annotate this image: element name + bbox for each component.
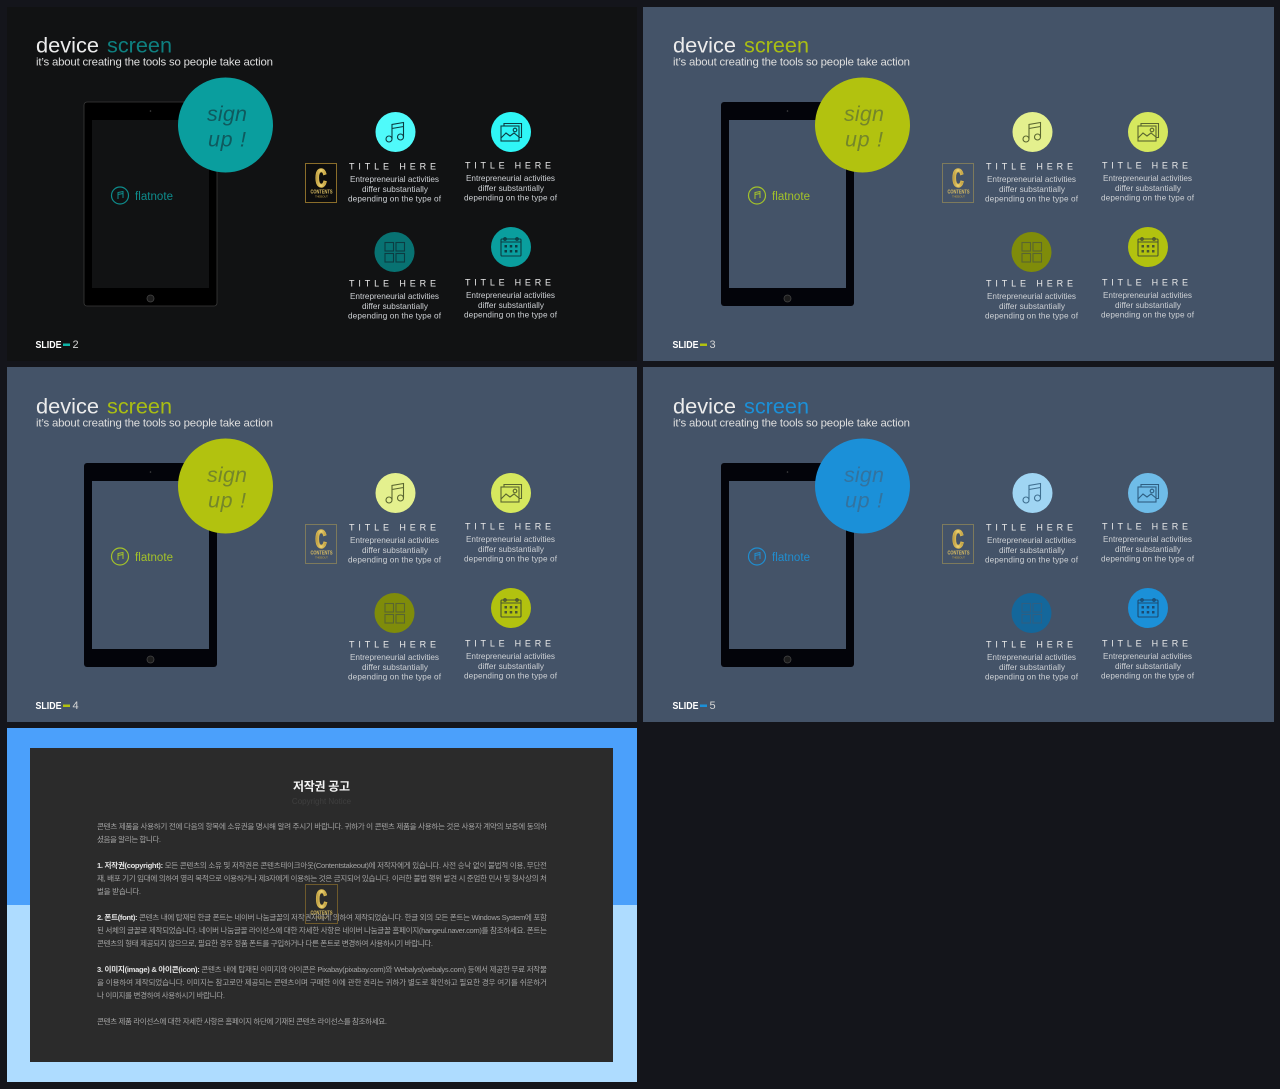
section 1: copyright: 재, 배포 기기 임대에 의하여 영리 목적으로 이용하거나 제3자에게 이용하는 것은 금지되어 있습니다. 이러한 불법 행위 발견 시 준엄한 민사 및 형사상의 처 xyxy=(97,873,547,883)
watermark logo xyxy=(942,164,974,202)
feature: photo xyxy=(464,473,558,564)
slide number: SLIDE xyxy=(36,340,62,351)
watermark logo: C xyxy=(952,166,964,196)
feature: photo: depending on the type of xyxy=(1101,554,1195,564)
sign up badge: sign xyxy=(207,102,247,126)
feature: photo: depending on the type of xyxy=(1101,194,1195,202)
feature: photo: differ substantially xyxy=(478,545,545,554)
slide number: 5 xyxy=(710,700,716,712)
watermark logo: C xyxy=(315,166,327,196)
section 2: font: 된 서체의 글꼴로 제작되었습니다. 네이버 나눔글꼴 라이선스에 대한 자세한 사항은 네이버 나눔글꼴 홈페이지(hangeul.naver.com)를 참조하세요. 폰트는 xyxy=(97,925,547,935)
tablet device xyxy=(84,463,217,667)
flatnote logo xyxy=(112,187,173,204)
section 3: image and icon: 3. 이미지(image) & 아이콘(icon): 콘텐츠 내에 탑재된 이미지와 아이콘은 Pixabay(pixabay.com)와 Webalys(webalys.com) 등에서 제공한 무료 저작물 xyxy=(97,964,547,974)
feature: grid: TITLE HERE xyxy=(349,278,436,288)
heading: device screen: device xyxy=(673,34,736,58)
feature: grid: Entrepreneurial activities xyxy=(987,653,1076,662)
watermark logo: THEBOUT xyxy=(315,916,328,920)
feature: grid: Entrepreneurial activities xyxy=(987,292,1076,301)
feature: photo: differ substantially xyxy=(478,184,545,193)
heading: device screen: device xyxy=(36,34,99,58)
feature: photo xyxy=(1101,473,1195,564)
tablet device xyxy=(84,102,217,306)
feature: calendar: Entrepreneurial activities xyxy=(1103,652,1192,661)
feature: grid: depending on the type of xyxy=(985,312,1079,320)
flatnote logo xyxy=(112,548,173,565)
feature: music: differ substantially xyxy=(999,546,1066,555)
watermark logo: CONTENTS xyxy=(310,190,333,196)
feature: calendar: differ substantially xyxy=(478,301,545,310)
flatnote logo: flatnote xyxy=(135,552,173,564)
feature: calendar: TITLE HERE xyxy=(1102,278,1188,288)
section 2: font: 2. 폰트(font): 콘텐츠 내에 탑재된 한글 폰트는 네이버 나눔글꼴의 저작권자에게 의하여 제작되었습니다. 한글 외의 모든 폰트는 Windows System에 포함 xyxy=(97,912,547,922)
sign up badge: sign xyxy=(844,463,884,487)
feature: calendar: Entrepreneurial activities xyxy=(466,291,555,300)
notice title: 저작권 공고 xyxy=(293,778,350,794)
heading: device screen: device xyxy=(36,396,99,418)
heading: device screen: screen xyxy=(107,34,172,58)
closing line: 콘텐츠 제품 라이선스에 대한 자세한 사항은 홈페이지 하단에 기재된 콘텐츠 라이선스를 참조하세요. xyxy=(97,1016,387,1026)
panel: slide 5 xyxy=(643,367,1274,722)
feature: grid: Entrepreneurial activities xyxy=(350,653,439,662)
feature: calendar: differ substantially xyxy=(478,662,545,671)
feature: music: Entrepreneurial activities xyxy=(987,175,1076,184)
feature: music: differ substantially xyxy=(999,185,1066,194)
sign up badge: sign xyxy=(207,463,247,487)
feature: calendar xyxy=(464,588,558,680)
watermark logo: THEBOUT xyxy=(315,556,328,560)
feature: photo xyxy=(464,112,558,202)
section 1: copyright xyxy=(97,860,547,896)
watermark logo: THEBOUT xyxy=(315,194,328,198)
feature: music xyxy=(985,112,1079,204)
feature: photo: TITLE HERE xyxy=(465,160,551,170)
heading: device screen xyxy=(36,34,172,58)
feature: music: TITLE HERE xyxy=(349,522,436,532)
slide number: SLIDE xyxy=(672,340,699,351)
feature: music xyxy=(985,473,1079,564)
heading: device screen xyxy=(673,396,809,418)
section 2: font xyxy=(97,912,547,948)
heading: device screen: device xyxy=(673,396,736,418)
feature: music: TITLE HERE xyxy=(986,522,1073,532)
sign up badge: up ! xyxy=(208,128,246,152)
section 3: image and icon: 을 이용하여 제작되었습니다. 이미지는 참고로만 제공되는 콘텐츠이며 구매한 이에 관한 권리는 귀하가 별도로 확인하고 필요한 경우 여기를 쉬운하거 xyxy=(97,977,547,987)
feature: music: differ substantially xyxy=(362,546,429,555)
feature: music: Entrepreneurial activities xyxy=(350,536,439,545)
feature: photo: TITLE HERE xyxy=(465,522,551,532)
feature: grid: depending on the type of xyxy=(348,312,442,320)
feature: calendar: TITLE HERE xyxy=(465,638,551,648)
slide number xyxy=(672,700,716,712)
feature: photo: Entrepreneurial activities xyxy=(466,174,555,183)
feature: photo: Entrepreneurial activities xyxy=(1103,174,1192,183)
feature: photo: Entrepreneurial activities xyxy=(466,535,555,544)
subtitle: it’s about creating the tools so people take action xyxy=(36,56,273,68)
feature: calendar: differ substantially xyxy=(1115,301,1182,310)
watermark logo xyxy=(942,524,974,564)
feature: grid xyxy=(985,593,1079,682)
feature: music: TITLE HERE xyxy=(349,162,436,172)
slide number: SLIDE xyxy=(36,701,62,712)
heading: device screen: screen xyxy=(107,396,172,418)
watermark logo: THEBOUT xyxy=(952,556,965,560)
feature: grid: differ substantially xyxy=(362,302,429,311)
watermark logo: CONTENTS xyxy=(310,550,333,556)
feature: calendar: TITLE HERE xyxy=(1102,638,1188,648)
feature: music: depending on the type of xyxy=(985,556,1079,564)
section 3: image and icon: 나 이미지를 변경하여 사용하시기 바랍니다. xyxy=(97,990,225,1000)
section 1: copyright: 벌을 받습니다. xyxy=(97,886,141,896)
feature: music: differ substantially xyxy=(362,185,429,194)
slide number: 4 xyxy=(72,700,79,712)
sign up badge: up ! xyxy=(845,128,883,152)
watermark logo: THEBOUT xyxy=(952,194,965,198)
watermark logo: CONTENTS xyxy=(948,190,970,196)
flatnote logo: flatnote xyxy=(135,191,173,203)
feature: photo: differ substantially xyxy=(1115,184,1182,193)
feature: grid xyxy=(348,593,442,682)
feature: music: depending on the type of xyxy=(985,194,1079,204)
sign up badge: up ! xyxy=(208,488,246,512)
sign up badge xyxy=(178,78,273,172)
feature: calendar: depending on the type of xyxy=(1101,310,1195,320)
watermark logo: C xyxy=(315,527,327,557)
watermark logo xyxy=(306,164,336,202)
heading: device screen: screen xyxy=(744,34,809,58)
slide number xyxy=(36,700,79,712)
tablet device xyxy=(721,102,854,306)
feature: music: depending on the type of xyxy=(348,194,442,204)
feature: calendar: differ substantially xyxy=(1115,662,1182,671)
feature: calendar xyxy=(1101,227,1195,320)
sign up badge: sign xyxy=(844,102,884,126)
slide number: 3 xyxy=(710,339,716,351)
flatnote logo: flatnote xyxy=(772,552,810,564)
section 1: copyright: 1. 저작권(copyright): 모든 콘텐츠의 소유 및 저작권은 콘텐츠테이크아웃(Contentstakeout)에 저작자에게 있습니다. 사전 승낙 없이 불법적 이용, 무단전 xyxy=(97,860,547,870)
feature: photo: TITLE HERE xyxy=(1102,522,1188,532)
feature: grid: differ substantially xyxy=(362,663,429,672)
watermark logo: C xyxy=(316,887,328,917)
feature: calendar xyxy=(1101,588,1195,680)
section 3: image and icon xyxy=(97,964,547,1000)
feature: photo: TITLE HERE xyxy=(1102,160,1188,170)
watermark logo: CONTENTS xyxy=(310,910,333,916)
feature: calendar: Entrepreneurial activities xyxy=(1103,291,1192,300)
subtitle: it’s about creating the tools so people take action xyxy=(36,418,273,430)
heading: device screen xyxy=(36,396,172,418)
feature: music xyxy=(348,473,442,564)
subtitle: it’s about creating the tools so people take action xyxy=(673,56,910,68)
feature: grid: depending on the type of xyxy=(348,672,442,682)
feature: grid: differ substantially xyxy=(999,302,1066,311)
feature: grid: depending on the type of xyxy=(985,672,1079,682)
feature: photo: depending on the type of xyxy=(464,194,558,202)
feature: grid xyxy=(348,232,442,320)
intro paragraph xyxy=(97,821,547,844)
feature: calendar: depending on the type of xyxy=(1101,672,1195,680)
feature: photo: depending on the type of xyxy=(464,554,558,564)
feature: photo: differ substantially xyxy=(1115,545,1182,554)
intro paragraph: 셨음을 알리는 합니다. xyxy=(97,834,161,844)
feature: grid: TITLE HERE xyxy=(349,640,436,650)
feature: grid: TITLE HERE xyxy=(986,278,1073,288)
feature: music xyxy=(348,112,442,204)
feature: calendar: Entrepreneurial activities xyxy=(466,652,555,661)
feature: calendar: depending on the type of xyxy=(464,310,558,320)
heading: device screen xyxy=(673,34,809,58)
flatnote logo xyxy=(748,548,810,565)
section 2: font: 콘텐츠의 형태 제공되지 않으므로, 필요한 경우 정품 폰트를 구입하거나 다른 폰트로 변경하여 사용하시기 바랍니다. xyxy=(97,938,433,948)
feature: calendar xyxy=(464,227,558,320)
intro paragraph: 콘텐츠 제품을 사용하기 전에 다음의 항목에 소유권을 명시해 알려 주시기 바랍니다. 귀하가 이 콘텐츠 제품을 사용하는 것은 사용자 계약의 보증에 동의하 xyxy=(97,821,547,831)
feature: music: Entrepreneurial activities xyxy=(350,175,439,184)
panel: slide 3 xyxy=(643,7,1274,361)
flatnote logo: flatnote xyxy=(772,191,810,203)
sign up badge xyxy=(815,438,910,534)
feature: photo: Entrepreneurial activities xyxy=(1103,535,1192,544)
feature: music: depending on the type of xyxy=(348,556,442,564)
feature: calendar: TITLE HERE xyxy=(465,278,551,288)
notice subtitle: Copyright Notice xyxy=(292,797,352,806)
feature: music: Entrepreneurial activities xyxy=(987,536,1076,545)
watermark logo: CONTENTS xyxy=(948,550,970,556)
feature: grid: differ substantially xyxy=(999,663,1066,672)
sign up badge: up ! xyxy=(845,488,883,512)
slide number: SLIDE xyxy=(672,701,699,712)
watermark logo: C xyxy=(952,527,964,557)
feature: calendar: depending on the type of xyxy=(464,672,558,680)
feature: photo xyxy=(1101,112,1195,202)
watermark logo xyxy=(306,884,338,924)
feature: grid xyxy=(985,232,1079,320)
feature: grid: Entrepreneurial activities xyxy=(350,292,439,301)
heading: device screen: screen xyxy=(744,396,809,418)
tablet device xyxy=(721,463,854,667)
slide number: 2 xyxy=(72,339,79,351)
slide number xyxy=(672,339,716,351)
flatnote logo xyxy=(748,187,810,204)
sign up badge xyxy=(178,438,273,534)
feature: grid: TITLE HERE xyxy=(986,640,1073,650)
panel: slide 4 xyxy=(7,367,637,722)
sign up badge xyxy=(815,78,910,172)
slide number xyxy=(36,339,79,351)
watermark logo xyxy=(306,524,336,564)
panel: copyright notice xyxy=(7,728,637,1082)
feature: music: TITLE HERE xyxy=(986,162,1073,172)
panel: slide 2 xyxy=(7,7,637,361)
subtitle: it’s about creating the tools so people take action xyxy=(673,418,910,430)
